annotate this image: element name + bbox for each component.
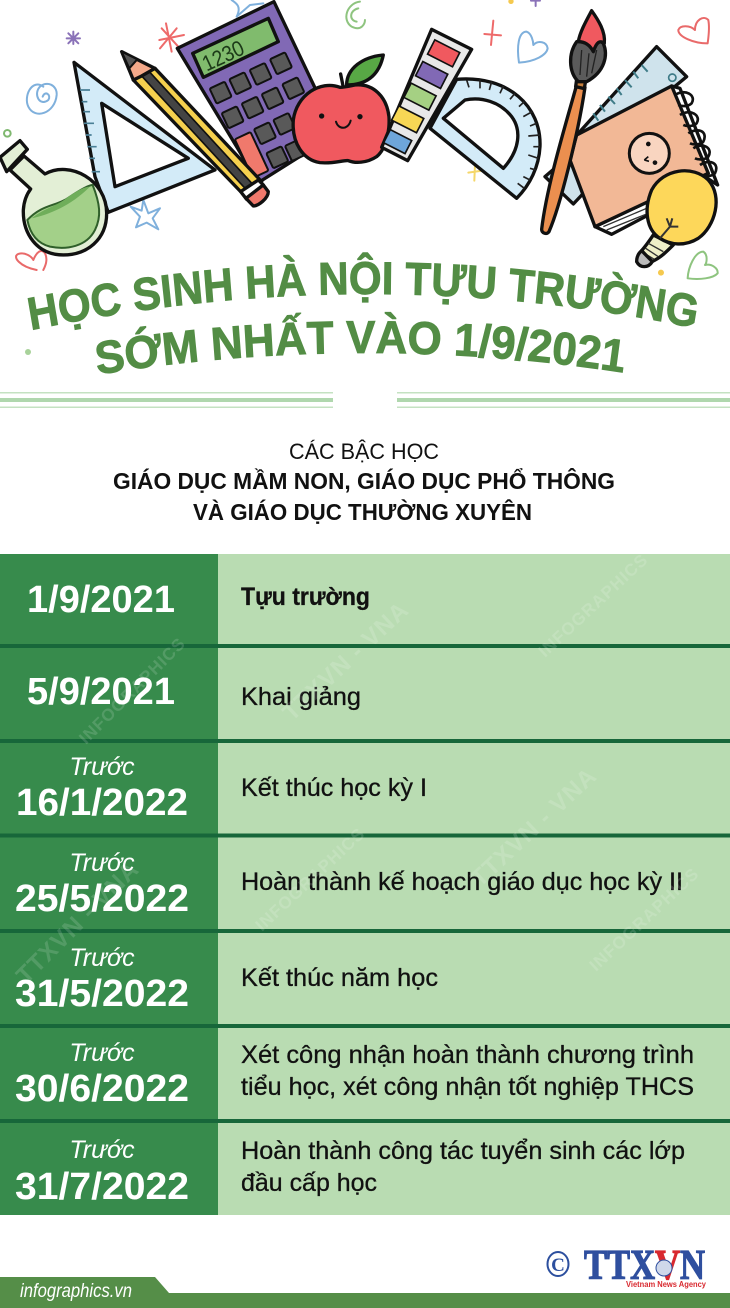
row: 31/7/2022: Hoàn thành công tác tuyển sinh các lớp bbox=[241, 1137, 685, 1165]
watermarks: TTXVN - VNA bbox=[278, 596, 414, 726]
row: 16/1/2022 bbox=[16, 753, 427, 824]
icon: protractor bbox=[430, 79, 540, 198]
logo: TTXVN Vietnam News Agency bbox=[548, 1243, 706, 1289]
watermarks: INFOGRAPHICS bbox=[586, 864, 703, 975]
row: 1/9/2021: 1/9/2021 bbox=[27, 579, 175, 621]
logo wordmark: TTXVN bbox=[584, 1243, 705, 1289]
row: 31/5/2022 bbox=[15, 944, 438, 1015]
row: 30/6/2022: Trước bbox=[69, 1039, 135, 1067]
title line 1: HỌC SINH HÀ NỘI TỰU TRƯỜNG bbox=[28, 252, 697, 330]
icon: decorative doodles right bbox=[468, 0, 718, 279]
title bbox=[28, 252, 697, 374]
illustration: school supplies left group bbox=[0, 0, 365, 270]
icon: notebook bbox=[570, 86, 718, 234]
icon: paint palette bbox=[382, 29, 472, 161]
row: 1/9/2021: Tựu trường bbox=[241, 583, 370, 611]
row: 1/9/2021 bbox=[27, 579, 370, 621]
footer bar bbox=[0, 1277, 730, 1308]
row: 31/7/2022: Trước bbox=[69, 1136, 135, 1164]
row: 31/7/2022: đầu cấp học bbox=[241, 1169, 377, 1197]
row: 5/9/2021: Khai giảng bbox=[241, 683, 361, 711]
watermarks bbox=[11, 550, 703, 989]
row: 31/7/2022 bbox=[15, 1136, 685, 1208]
row: 31/5/2022: 31/5/2022 bbox=[15, 973, 189, 1015]
icon: blue ruler behind notebook bbox=[545, 47, 687, 204]
row: 31/5/2022: Kết thúc năm học bbox=[241, 964, 438, 992]
row: 31/7/2022: 31/7/2022 bbox=[15, 1166, 189, 1208]
row: 31/5/2022: Trước bbox=[69, 944, 135, 972]
timeline table bbox=[0, 550, 730, 1215]
row: 30/6/2022: Xét công nhận hoàn thành chương trình bbox=[241, 1041, 694, 1069]
icon: protractor tick marks bbox=[467, 79, 540, 188]
illustration: apple bbox=[293, 55, 389, 163]
subheading: VÀ GIÁO DỤC THƯỜNG XUYÊN bbox=[193, 498, 532, 525]
row: 25/5/2022: Trước bbox=[69, 849, 135, 877]
icon: decorative doodles left bbox=[4, 0, 365, 270]
footer website label: infographics.vn bbox=[20, 1281, 132, 1302]
watermarks: INFOGRAPHICS bbox=[252, 824, 369, 935]
row: 25/5/2022: 25/5/2022 bbox=[15, 878, 189, 920]
row: 30/6/2022: 30/6/2022 bbox=[15, 1068, 189, 1110]
row: 30/6/2022: tiểu học, xét công nhận tốt nghiệp THCS bbox=[241, 1073, 694, 1101]
table background bbox=[0, 554, 730, 1215]
watermarks: TTXVN - VNA bbox=[466, 762, 602, 892]
title line 2: SỚM NHẤT VÀO 1/9/2021 bbox=[96, 312, 624, 374]
row: 30/6/2022 bbox=[15, 1039, 694, 1110]
row: 25/5/2022 bbox=[15, 849, 683, 920]
subheading: CÁC BẬC HỌC bbox=[289, 439, 439, 464]
icon: paintbrush bbox=[542, 11, 605, 233]
logo tagline: Vietnam News Agency bbox=[626, 1279, 706, 1289]
icon: copyright: C bbox=[551, 1255, 565, 1276]
icon: flask bbox=[0, 141, 107, 255]
subheading: GIÁO DỤC MẦM NON, GIÁO DỤC PHỔ THÔNG bbox=[113, 467, 615, 494]
row: 16/1/2022: Trước bbox=[69, 753, 135, 781]
row: 25/5/2022: Hoàn thành kế hoạch giáo dục học kỳ II bbox=[241, 868, 683, 896]
icon: calculator: 1230 bbox=[198, 35, 248, 76]
icon: pencil bbox=[122, 52, 268, 206]
watermarks: INFOGRAPHICS bbox=[75, 634, 189, 748]
icon: copyright bbox=[548, 1252, 568, 1276]
icon: set square ruler bbox=[74, 62, 215, 212]
row: 5/9/2021 bbox=[27, 671, 361, 713]
row: 16/1/2022: Kết thúc học kỳ I bbox=[241, 774, 427, 802]
logo globe bbox=[656, 1260, 672, 1276]
illustration: school supplies right group bbox=[382, 0, 718, 279]
icon: light bulb bbox=[637, 171, 716, 267]
watermarks: INFOGRAPHICS bbox=[535, 550, 652, 661]
watermarks: TTXVN - VNA bbox=[11, 856, 145, 989]
subheading bbox=[113, 439, 615, 525]
decorative green dot bbox=[25, 349, 31, 355]
icon: calculator bbox=[177, 2, 337, 183]
row: 16/1/2022: 16/1/2022 bbox=[16, 782, 188, 824]
row: 5/9/2021: 5/9/2021 bbox=[27, 671, 175, 713]
